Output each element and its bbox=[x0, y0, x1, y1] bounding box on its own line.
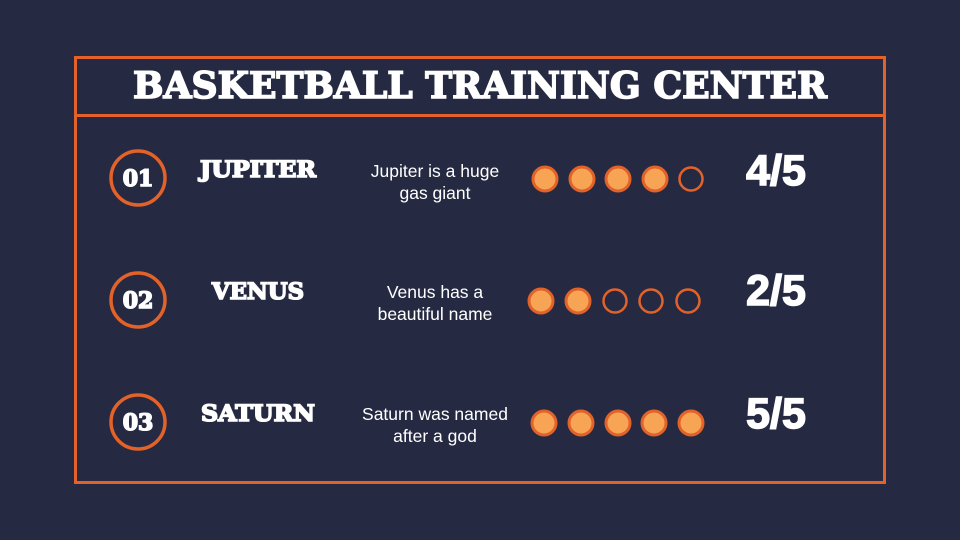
title: BASKETBALL TRAINING CENTER bbox=[133, 65, 828, 107]
number badge 01 bbox=[111, 151, 165, 205]
score: 2/5 bbox=[746, 267, 806, 315]
score: 5/5 bbox=[746, 390, 806, 438]
panel: frame bbox=[75, 58, 885, 482]
name: SATURN bbox=[201, 401, 315, 427]
row: Venus bbox=[111, 267, 806, 327]
description: gas giant bbox=[399, 183, 471, 203]
description: after a god bbox=[393, 426, 477, 446]
rating dots bbox=[529, 289, 700, 313]
number badge 02: 02 bbox=[123, 288, 153, 314]
row: Saturn bbox=[111, 390, 806, 449]
name: VENUS bbox=[211, 279, 304, 305]
description: beautiful name bbox=[378, 304, 492, 324]
rating dots bbox=[533, 167, 702, 191]
number badge 03: 03 bbox=[123, 410, 153, 436]
name: JUPITER bbox=[198, 157, 317, 183]
number badge 02 bbox=[111, 273, 165, 327]
description: Venus has a bbox=[387, 282, 483, 302]
row: Jupiter bbox=[111, 147, 806, 205]
rating dots bbox=[532, 411, 703, 435]
description: Saturn was named bbox=[362, 404, 508, 424]
number badge 01: 01 bbox=[123, 166, 153, 192]
number badge 03 bbox=[111, 395, 165, 449]
description: Jupiter is a huge bbox=[371, 161, 499, 181]
score: 4/5 bbox=[746, 147, 806, 195]
